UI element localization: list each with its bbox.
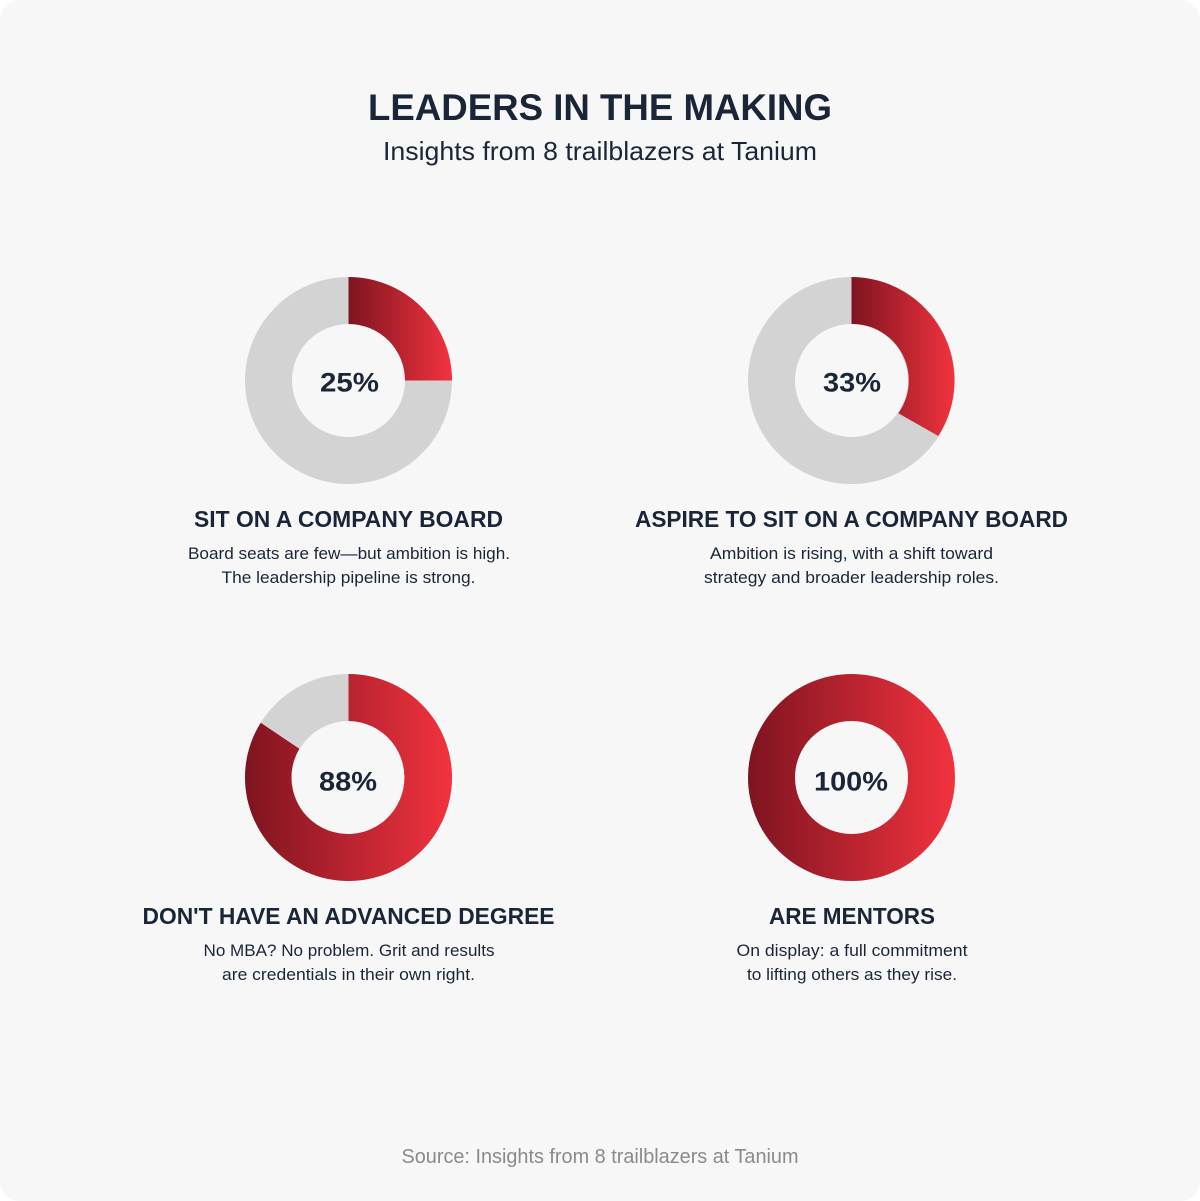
- description: [204, 941, 495, 984]
- donut chart: 100%: 100%: [814, 766, 888, 796]
- description: [188, 544, 510, 587]
- description: On display: a full commitment: [736, 941, 968, 960]
- description: [736, 941, 968, 984]
- donut chart: 88%: [245, 674, 452, 881]
- description: Ambition is rising, with a shift toward: [710, 544, 993, 563]
- heading: ARE MENTORS: [769, 903, 935, 929]
- donut chart: 33%: [772, 277, 954, 460]
- donut chart: 25%: 25%: [320, 368, 379, 398]
- donut chart: 88%: 88%: [319, 766, 377, 796]
- panel: sit on a company board: [188, 277, 510, 587]
- description: are credentials in their own right.: [222, 965, 475, 984]
- description: Board seats are few—but ambition is high.: [188, 544, 510, 563]
- description: [704, 544, 999, 587]
- subtitle: Insights from 8 trailblazers at Tanium: [383, 136, 817, 166]
- description: No MBA? No problem. Grit and results: [204, 941, 495, 960]
- panel: aspire to sit on a company board: [635, 277, 1068, 587]
- donut chart: 100%: [772, 698, 932, 858]
- heading: SIT ON A COMPANY BOARD: [194, 506, 503, 532]
- donut chart: 25%: [268, 277, 452, 460]
- description: to lifting others as they rise.: [747, 965, 957, 984]
- description: The leadership pipeline is strong.: [222, 568, 476, 587]
- title: LEADERS IN THE MAKING: [368, 87, 832, 128]
- donut chart: 33%: 33%: [823, 368, 881, 398]
- source note: Source: Insights from 8 trailblazers at Tanium: [402, 1146, 798, 1168]
- heading: ASPIRE TO SIT ON A COMPANY BOARD: [635, 506, 1068, 532]
- panel: don't have an advanced degree: [142, 674, 554, 984]
- description: strategy and broader leadership roles.: [704, 568, 999, 587]
- panel: are mentors: [736, 698, 968, 984]
- heading: DON'T HAVE AN ADVANCED DEGREE: [142, 903, 554, 929]
